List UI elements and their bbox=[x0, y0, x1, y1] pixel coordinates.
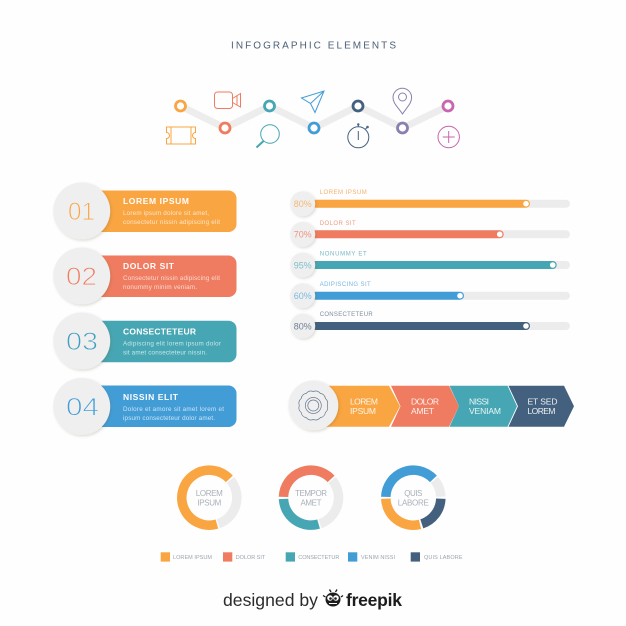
legend item 3 bbox=[286, 552, 339, 562]
card 1 heading: LOREM IPSUM bbox=[123, 196, 189, 206]
card 1 bbox=[53, 182, 236, 240]
node 2 bbox=[220, 123, 230, 133]
card 3 body bbox=[123, 340, 221, 356]
icon: stopwatch bbox=[348, 124, 369, 148]
bar label 4: ADIPISCING SIT bbox=[320, 282, 371, 288]
donut 1 label bbox=[196, 489, 223, 508]
chevron 2 bbox=[391, 386, 459, 427]
chevron 4 bbox=[508, 386, 574, 427]
percent circle 3 bbox=[290, 252, 315, 278]
number circle 4 bbox=[53, 378, 110, 435]
legend item 5 bbox=[411, 552, 463, 562]
icon: video camera bbox=[214, 92, 240, 108]
card 4 bbox=[53, 378, 236, 435]
donut 2 label: AMET bbox=[300, 498, 322, 508]
card 4 heading: NISSIN ELIT bbox=[123, 392, 179, 402]
legend item 4 bbox=[348, 552, 395, 562]
node 4 bbox=[309, 123, 319, 133]
percent 2: 70% bbox=[294, 230, 312, 240]
card 4 body: ipsum consecteteur dolor amet. bbox=[123, 415, 215, 422]
number 2: 02 bbox=[66, 263, 97, 291]
icon: magnifier bbox=[256, 125, 279, 148]
attribution bbox=[223, 590, 402, 610]
donut 3 label: QUIS bbox=[404, 489, 422, 498]
percent 5: 80% bbox=[294, 321, 312, 331]
progress bar 3 bbox=[290, 252, 570, 278]
percent 1: 80% bbox=[294, 199, 312, 209]
legend item 1: LOREM IPSUM bbox=[173, 555, 212, 561]
timeline bbox=[176, 101, 453, 133]
bar label 5: CONSECTETEUR bbox=[320, 312, 373, 318]
donut 2 label bbox=[295, 489, 327, 508]
card 3 heading: CONSECTETEUR bbox=[123, 326, 196, 336]
donut 2 bbox=[284, 470, 339, 525]
percent 3: 95% bbox=[294, 260, 312, 270]
chevron 3 bbox=[450, 386, 517, 427]
chevron 4: ET SED bbox=[528, 396, 558, 406]
node 1 bbox=[176, 101, 186, 111]
legend item 1 bbox=[161, 552, 212, 562]
bar label 1: LOREM IPSUM bbox=[320, 190, 367, 196]
donut 3 label: LABORE bbox=[398, 498, 429, 508]
legend item 4: VENIM NISSI bbox=[361, 555, 395, 561]
card 2 body: Consectetur nissin adipiscing elit bbox=[123, 275, 220, 282]
percent circle 1 bbox=[290, 191, 315, 216]
donut 2 label: TEMPOR bbox=[295, 489, 327, 498]
card 3 body: Adipiscing elit lorem ipsum dolor bbox=[123, 340, 221, 348]
attribution text: designed by bbox=[223, 590, 318, 610]
chevron 3: NISSI bbox=[469, 396, 489, 406]
percent circle 2 bbox=[290, 222, 315, 247]
card 2 body: nonummy minim veniam. bbox=[123, 284, 197, 291]
number 4: 04 bbox=[66, 394, 99, 422]
chevron 1: IPSUM bbox=[350, 406, 376, 416]
donut 3 label bbox=[398, 489, 429, 508]
donut 3 bbox=[386, 470, 441, 525]
bar label 2: DOLOR SIT bbox=[320, 221, 356, 227]
title: INFOGRAPHIC ELEMENTS bbox=[231, 40, 396, 52]
card 3 bbox=[53, 312, 236, 370]
legend item 3: CONSECTETUR bbox=[298, 555, 339, 561]
icon: gear bbox=[299, 391, 328, 420]
card 3 body: sit amet consecteteur nissin. bbox=[123, 350, 207, 356]
legend item 2: DOLOR SIT bbox=[236, 555, 266, 561]
card 2 body bbox=[123, 275, 220, 291]
card 2 heading: DOLOR SIT bbox=[123, 261, 175, 271]
card 1 body bbox=[123, 210, 220, 226]
number circle 1 bbox=[53, 182, 110, 240]
number 3: 03 bbox=[66, 328, 98, 356]
donut 1 label: IPSUM bbox=[197, 498, 222, 508]
node 3 bbox=[264, 101, 274, 111]
freepik wordmark: freepik bbox=[346, 590, 402, 610]
card 4 body bbox=[123, 406, 224, 422]
node 6 bbox=[398, 123, 408, 133]
icon: paper plane bbox=[302, 91, 324, 112]
number 1: 01 bbox=[68, 198, 95, 226]
number circle 2 bbox=[53, 248, 110, 304]
chevron 1 bbox=[320, 386, 400, 427]
donut 1 bbox=[182, 470, 237, 525]
card 1 body: Lorem ipsum dolore sit amet, bbox=[123, 210, 209, 217]
legend item 2 bbox=[223, 552, 266, 562]
percent 4: 60% bbox=[294, 291, 312, 301]
gear circle bbox=[288, 380, 338, 430]
icon: map pin bbox=[393, 88, 412, 114]
legend bbox=[161, 552, 463, 562]
progress bar 2 bbox=[290, 221, 570, 247]
progress bar 4 bbox=[290, 282, 570, 308]
chevron 4: LOREM bbox=[528, 406, 556, 416]
percent circle 5 bbox=[290, 314, 315, 338]
chevron 3: VENIAM bbox=[469, 406, 501, 416]
chevron 2: AMET bbox=[411, 406, 434, 416]
progress bar 5 bbox=[290, 312, 570, 338]
node 7 bbox=[443, 101, 453, 111]
icon: freepik bee bbox=[323, 590, 343, 606]
progress bar 1 bbox=[290, 190, 570, 216]
card 1 body: consectetur nissin adipiscing elit bbox=[123, 219, 220, 226]
icon: ticket bbox=[166, 127, 196, 144]
chevron 2: DOLOR bbox=[411, 396, 439, 406]
icon: plus circle bbox=[438, 126, 459, 148]
card 2 bbox=[53, 248, 236, 304]
chevron process bbox=[288, 380, 574, 430]
percent circle 4 bbox=[290, 283, 315, 308]
card 4 body: Dolore et amore sit amet lorem et bbox=[123, 406, 224, 413]
number circle 3 bbox=[53, 312, 110, 370]
bar label 3: NONUMMY ET bbox=[320, 252, 367, 258]
donut 1 label: LOREM bbox=[196, 489, 223, 498]
legend item 5: QUIS LABORE bbox=[424, 555, 463, 561]
chevron 1: LOREM bbox=[350, 396, 378, 406]
node 5 bbox=[353, 101, 363, 111]
